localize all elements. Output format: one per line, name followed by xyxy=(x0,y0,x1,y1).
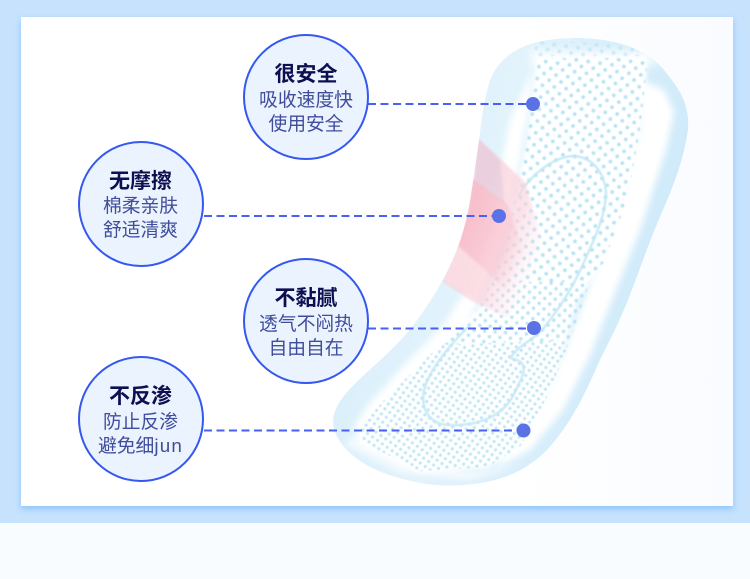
callout: 不反渗: 避免细jun xyxy=(98,434,183,456)
callout: 无摩擦: 无摩擦 xyxy=(109,170,172,192)
callout: 无摩擦 xyxy=(78,140,204,266)
callout: 不反渗: 不反渗 xyxy=(109,384,172,408)
red leak band xyxy=(443,138,542,318)
callout: 很安全: 吸收速度快 xyxy=(259,88,353,110)
connector lines xyxy=(204,104,530,430)
callout: 无摩擦: 舒适清爽 xyxy=(103,218,178,240)
callout: 不黏腻 xyxy=(243,258,369,384)
callout: 不黏腻: 不黏腻 xyxy=(274,287,338,310)
callout: 很安全 xyxy=(243,34,369,160)
callout: 不反渗 xyxy=(78,356,204,482)
callout: 不黏腻: 透气不闷热 xyxy=(259,313,353,334)
pad body xyxy=(333,38,688,486)
bottom strip xyxy=(0,523,750,579)
marker dots xyxy=(492,97,541,438)
callout: 很安全: 使用安全 xyxy=(268,112,344,134)
illustration: sanitary pad xyxy=(204,38,688,486)
callout: 不反渗: 防止反渗 xyxy=(103,410,178,432)
callout: 不黏腻: 自由自在 xyxy=(268,337,344,358)
dotted core xyxy=(358,56,648,473)
white wings xyxy=(345,50,674,480)
callout: 很安全: 很安全 xyxy=(274,62,338,86)
embossed channels xyxy=(423,156,606,425)
callout: 无摩擦: 棉柔亲肤 xyxy=(103,194,178,216)
